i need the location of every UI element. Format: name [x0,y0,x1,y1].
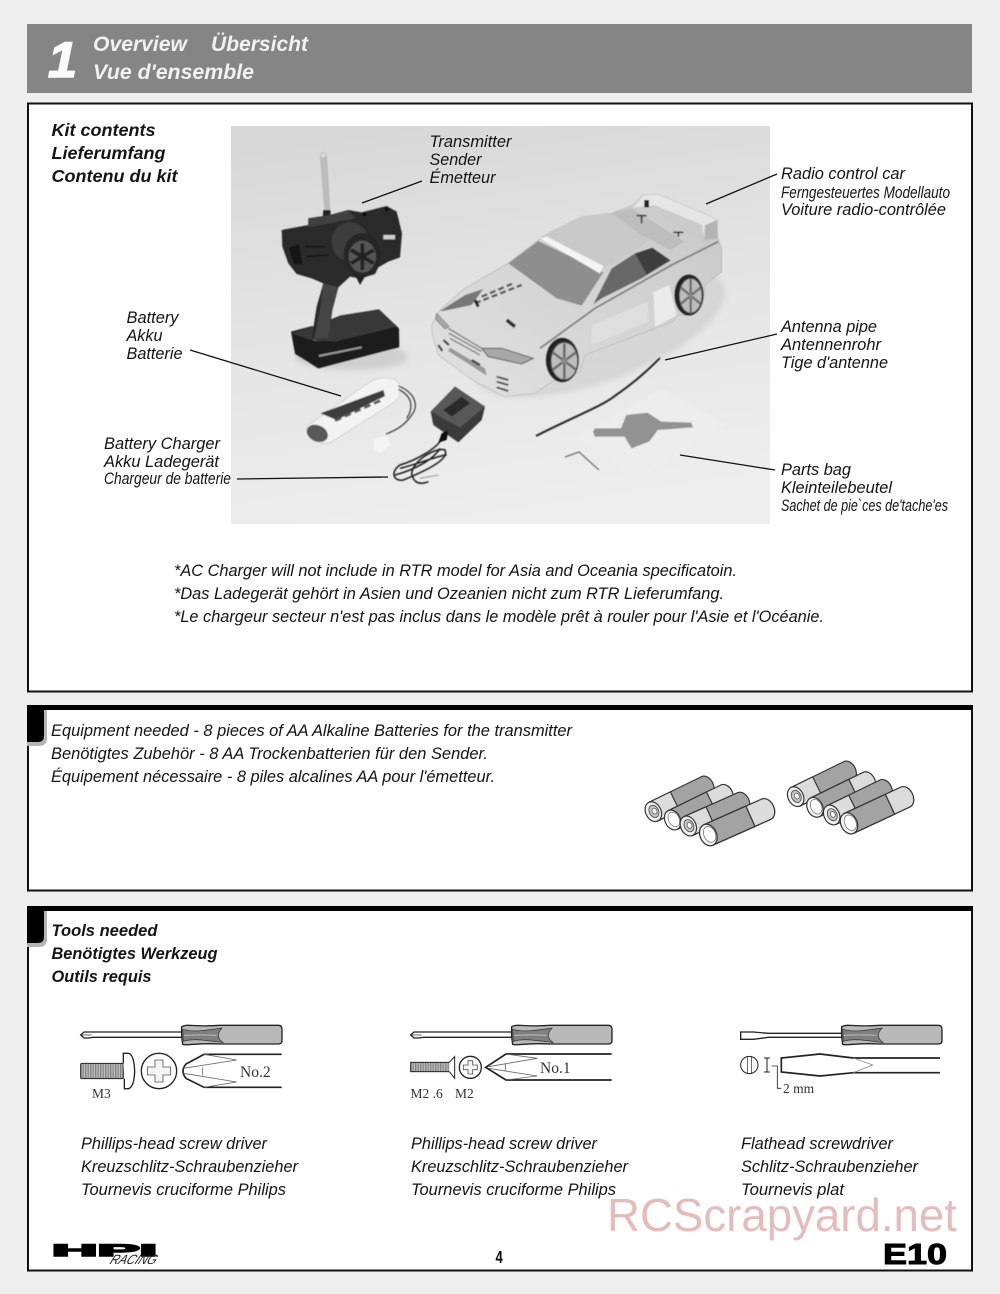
screwdriver drawing [81,1025,282,1045]
tip detail [183,1054,282,1087]
label: antenna pipe: Antennenrohr [780,336,882,354]
section title: Overview [93,33,189,56]
label: parts bag: Parts bag [781,461,852,479]
section number: 1 [48,32,77,88]
phillips head [459,1056,481,1078]
label: parts bag [781,461,948,515]
kit contents heading: Lieferumfang [52,143,166,163]
tip detail [781,1054,940,1076]
label: transmitter: Sender [430,151,483,169]
tool: flathead screwdriver: 2 mm [783,1081,815,1096]
leader lines [190,174,777,479]
panel tab [27,911,47,947]
tip detail [486,1054,612,1080]
tools heading: Tools needed [52,922,158,940]
label: battery charger: Chargeur de batterie [104,470,231,488]
label: battery charger: Akku Ladegerät [103,453,220,471]
caption: flathead: Tournevis plat [741,1181,845,1199]
caption: phillips No.1: Phillips-head screw driver [411,1135,598,1153]
tool: No.1 Phillips screwdriver [410,1025,612,1101]
caption: phillips No.2: Kreuzschlitz-Schraubenzieher [81,1158,299,1176]
equipment text: Équipement nécessaire - 8 piles alcalines AA pour l'émetteur. [51,767,495,786]
panel tab [27,710,47,746]
tool: flathead screwdriver [741,1025,942,1096]
logo: HPI Racing: RACING [107,1252,161,1267]
screw M3 [81,1053,135,1089]
caption: phillips No.1 [411,1135,629,1199]
label: antenna pipe: Tige d'antenne [781,354,888,372]
logo: HPI Racing [52,1241,161,1267]
equipment text [51,722,573,786]
tool: No.2 Phillips screwdriver [81,1025,282,1101]
tool: No.1 Phillips screwdriver: M2 .6 [410,1086,443,1101]
section title: Übersicht [211,33,309,56]
section title [93,33,309,84]
antenna pipe [536,358,660,436]
watermark: RCScrapyard.net [607,1189,957,1241]
charger footnote: *AC Charger will not include in RTR model for Asia and Oceania specificatoin. [174,562,737,580]
section header banner [27,24,972,93]
caption: phillips No.1: Tournevis cruciforme Philips [411,1181,616,1199]
caption: flathead: Schlitz-Schraubenzieher [741,1158,919,1176]
charger [394,387,485,483]
equipment text: Equipment needed - 8 pieces of AA Alkaline Batteries for the transmitter [51,722,573,740]
caption: phillips No.2: Tournevis cruciforme Philips [81,1181,286,1199]
screw M2.6 [411,1057,455,1078]
kit contents heading [52,120,179,186]
label: battery charger: Battery Charger [104,435,221,453]
caption: flathead [741,1135,919,1199]
icon: AA batteries [642,758,917,849]
car [432,194,741,424]
logo: E10: E10 [883,1239,947,1271]
panel: tools needed [27,906,973,1271]
charger footnote [174,562,824,626]
flat head end view [741,1056,781,1088]
tool: No.1 Phillips screwdriver: M2 [455,1086,474,1101]
caption: phillips No.1: Kreuzschlitz-Schraubenzieher [411,1158,629,1176]
tools heading: Benötigtes Werkzeug [52,945,218,963]
transmitter [282,152,408,370]
label: battery: Battery [126,309,180,327]
caption: phillips No.2: Phillips-head screw driver [81,1135,268,1153]
screwdriver drawing [411,1025,612,1045]
label: antenna pipe: Antenna pipe [780,318,877,336]
label: battery [126,309,182,363]
label: radio control car: Ferngesteuertes Modellauto [781,184,950,202]
logo: HPI Racing: HPI [52,1241,157,1260]
label: battery: Batterie [126,345,182,363]
tool: No.1 Phillips screwdriver: No.1 [540,1060,571,1077]
label: battery charger [103,435,231,488]
label: transmitter [430,133,513,187]
panel: equipment needed [27,705,973,890]
label: transmitter: Émetteur [430,168,497,187]
kit contents heading: Contenu du kit [52,166,179,186]
parts bag [575,388,728,482]
label: battery: Akku [126,327,162,345]
panel: kit contents [28,104,972,692]
hex key [565,452,599,470]
battery pack [304,378,415,453]
tools heading: Outils requis [52,968,152,986]
page number: 4 [496,1248,503,1268]
label: parts bag: Sachet de pie`ces de'tache'es [781,497,948,515]
caption: flathead: Flathead screwdriver [741,1135,894,1153]
label: transmitter: Transmitter [430,133,513,151]
label: antenna pipe [780,318,888,372]
charger footnote: *Das Ladegerät gehört in Asien und Ozeanien nicht zum RTR Lieferumfang. [174,585,724,603]
kit contents heading: Kit contents [52,120,156,140]
screwdriver drawing [741,1025,942,1045]
label: parts bag: Kleinteilebeutel [781,479,893,497]
label: radio control car: Radio control car [781,165,906,183]
caption: phillips No.2 [81,1135,299,1199]
tools heading [52,922,218,986]
label: radio control car: Voiture radio-contrôlée [781,201,946,219]
equipment text: Benötigtes Zubehör - 8 AA Trockenbatterien für den Sender. [51,745,488,763]
photo of kit [231,126,770,524]
label: radio control car [781,165,950,219]
charger footnote: *Le chargeur secteur n'est pas inclus dans le modèle prêt à rouler pour l'Asie et l'Océanie. [174,608,824,626]
tool: No.2 Phillips screwdriver: M3 [92,1086,111,1101]
phillips head [141,1053,177,1089]
tool: No.2 Phillips screwdriver: No.2 [240,1064,271,1081]
section title: Vue d'ensemble [93,61,254,84]
